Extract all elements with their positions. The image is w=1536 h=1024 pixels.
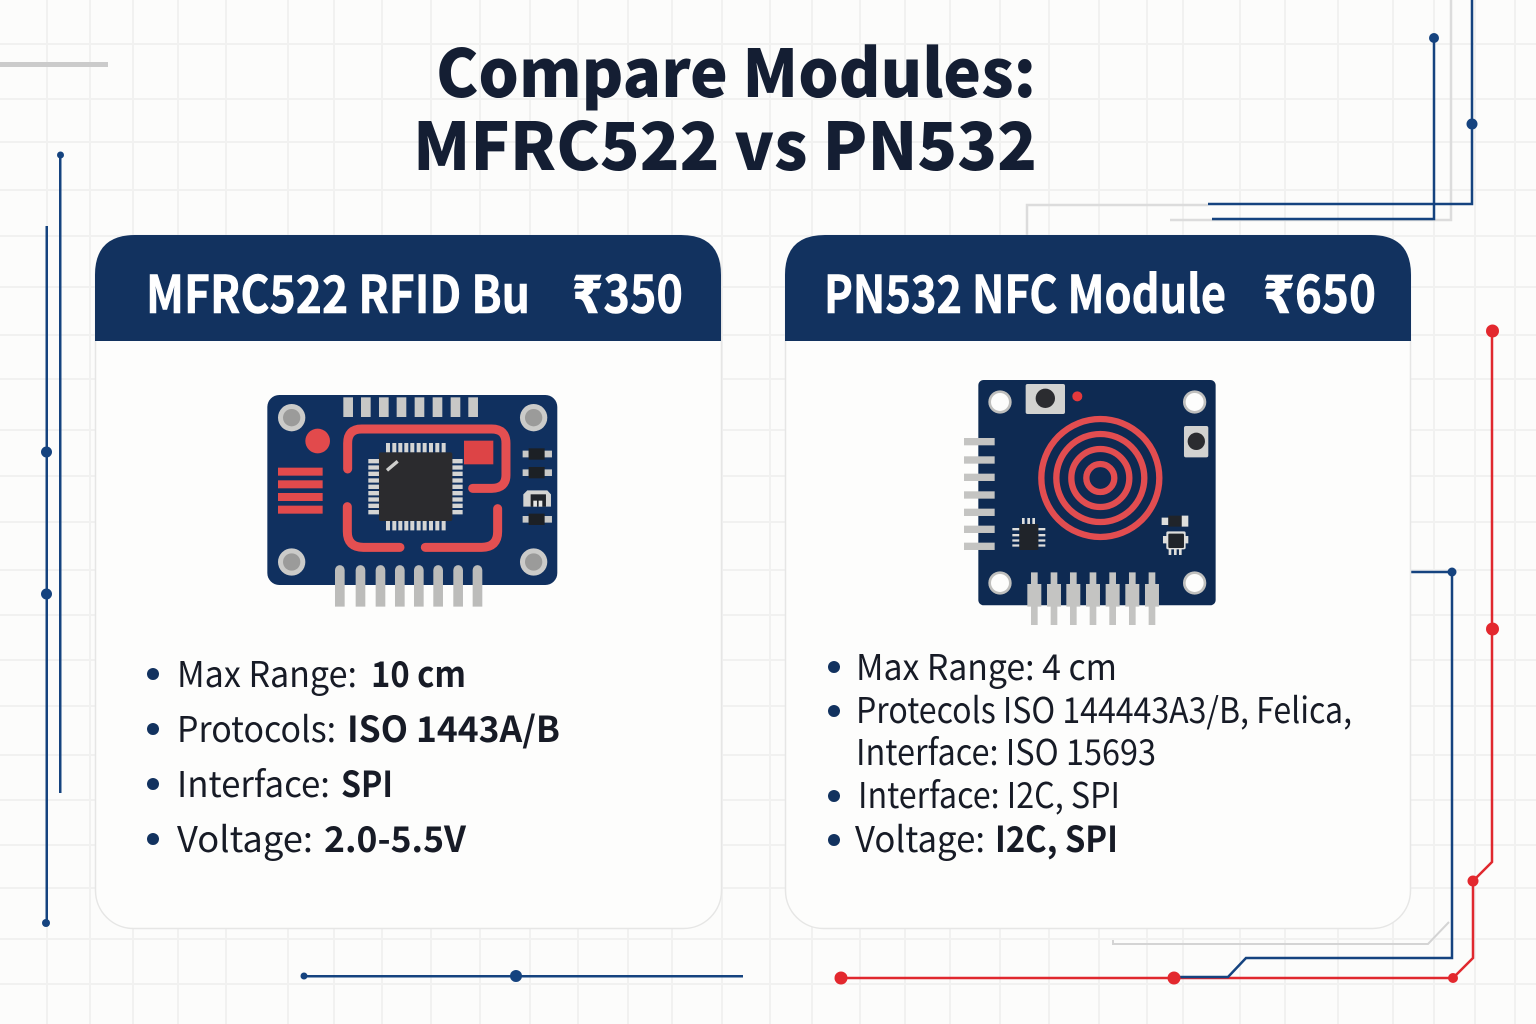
icon: PN532 circuit board <box>964 380 1216 625</box>
panel header: PN532: ₹650 <box>1263 253 1376 328</box>
panel header: MFRC522: MFRC522 RFID Bu <box>146 253 530 328</box>
spec list: MFRC522 <box>147 647 560 863</box>
spec list: MFRC522: Max Range: <box>177 647 357 698</box>
panel header: MFRC522: ₹350 <box>572 253 683 328</box>
spec list: MFRC522: Voltage: <box>177 812 313 863</box>
spec list: MFRC522: ISO 1443A/B <box>347 702 560 753</box>
circuit traces: bottom right <box>834 324 1499 984</box>
panel header: MFRC522 <box>95 235 721 341</box>
circuit traces: top right <box>1027 0 1478 235</box>
spec list: MFRC522: SPI <box>341 757 393 808</box>
circuit traces: bottom blue <box>300 970 743 982</box>
spec list: PN532: Interface: I2C, SPI <box>858 768 1120 819</box>
spec list: PN532: Protecols ISO 144443A3/B, Felica, <box>856 683 1352 734</box>
spec list: MFRC522: Interface: <box>177 757 330 808</box>
spec list: PN532: Voltage: <box>855 812 985 863</box>
spec list: PN532 <box>828 640 1352 863</box>
panel header: PN532 <box>785 235 1411 341</box>
spec list: MFRC522: Protocols: <box>177 702 336 753</box>
spec list: MFRC522: 10 cm <box>371 647 466 698</box>
spec list: PN532: Interface: ISO 15693 <box>856 725 1156 776</box>
circuit traces: left blue <box>41 152 64 927</box>
spec list: PN532: Max Range: 4 cm <box>856 640 1117 691</box>
panel header: PN532: PN532 NFC Module <box>824 253 1226 328</box>
title <box>413 21 1037 190</box>
spec list: MFRC522: 2.0-5.5V <box>324 812 467 863</box>
title: Compare Modules: <box>436 21 1036 117</box>
spec list: PN532: I2C, SPI <box>995 812 1118 863</box>
icon: MFRC522 circuit board <box>267 395 557 607</box>
title: MFRC522 vs PN532 <box>413 94 1037 190</box>
panel: MFRC522 <box>95 235 722 928</box>
decorative circuit: top left grey bar <box>0 62 108 67</box>
panel: PN532 <box>785 235 1411 928</box>
